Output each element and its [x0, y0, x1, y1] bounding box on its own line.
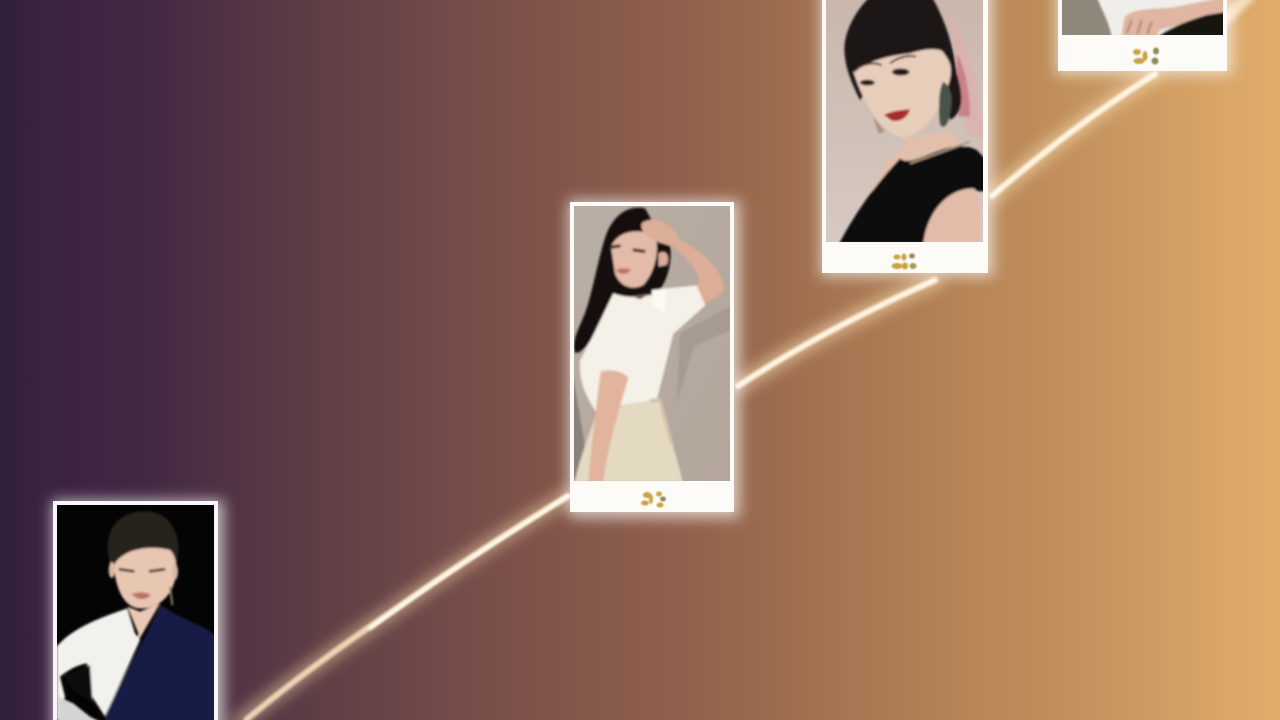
card 1: woman in navy blazer — [52, 500, 224, 720]
card 3: woman in black dress — [820, 0, 994, 277]
glowing rising line — [240, 0, 1250, 720]
photo 4 — [1062, 0, 1227, 37]
logo mark 3 — [892, 254, 916, 270]
photo 2 — [570, 206, 730, 482]
logo mark 4 — [1133, 48, 1159, 64]
card 4: cropped portrait at top right — [1056, 0, 1233, 75]
photo 1 — [57, 505, 217, 720]
logo mark 2 — [641, 492, 666, 508]
card 2: woman in white blouse and cream skirt — [568, 200, 740, 518]
photo 3 — [826, 0, 987, 243]
